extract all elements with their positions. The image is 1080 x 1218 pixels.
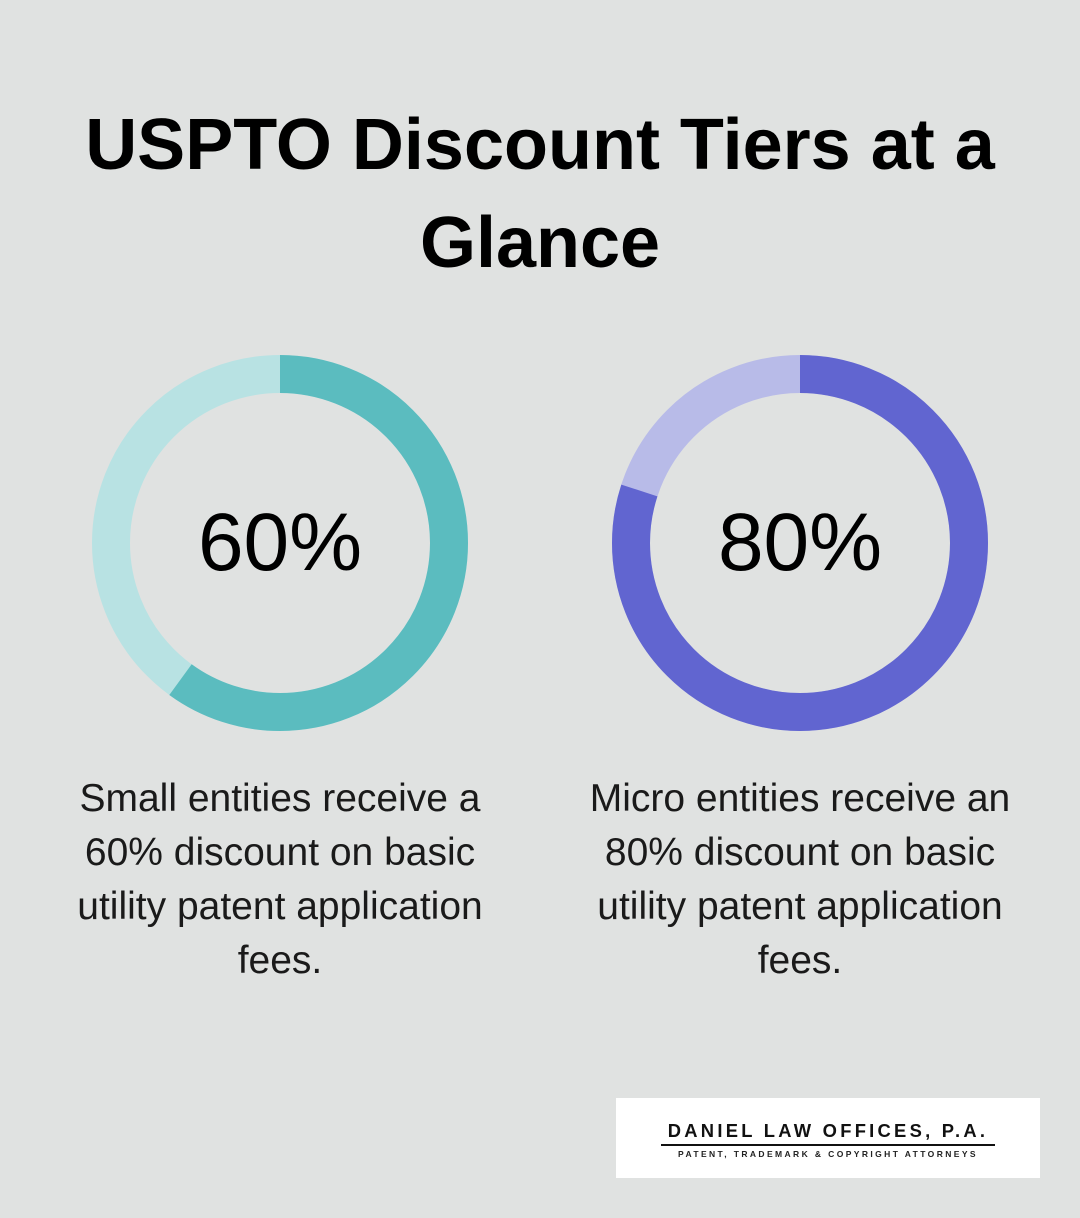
text: small entity description: Small entities receive a 60% discount on basic utility patent application fees. <box>77 777 483 982</box>
chart: small entity donut <box>92 355 468 731</box>
logo <box>616 1098 1040 1178</box>
logo: PATENT, TRADEMARK & COPYRIGHT ATTORNEYS <box>678 1149 978 1159</box>
text: micro entity description: Micro entities receive an 80% discount on basic utility patent application fees. <box>590 777 1010 982</box>
title: USPTO Discount Tiers at a <box>85 105 995 185</box>
logo: DANIEL LAW OFFICES, P.A. <box>668 1121 988 1141</box>
title <box>85 105 996 283</box>
title: Glance <box>420 203 660 283</box>
chart: micro entity donut: 80% <box>718 497 882 588</box>
chart: micro entity donut <box>612 355 988 731</box>
chart: small entity donut: 60% <box>198 497 362 588</box>
